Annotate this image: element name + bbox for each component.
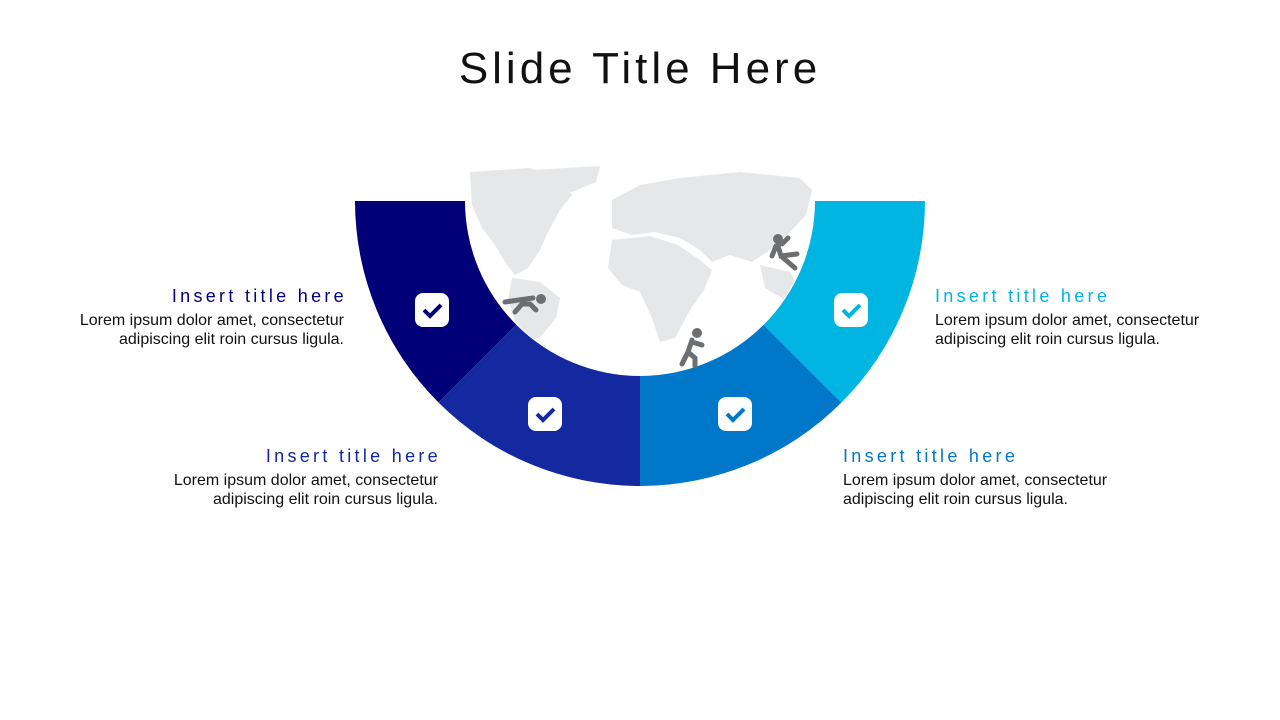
text block 3 [843, 446, 1107, 508]
text block 4: Insert title here [935, 286, 1110, 306]
text block 2: Lorem ipsum dolor amet, consectetur [174, 472, 438, 489]
segment 4 [764, 201, 925, 402]
segment 3 [640, 325, 842, 486]
text block 1: adipiscing elit roin cursus ligula. [119, 331, 344, 348]
text block 2: adipiscing elit roin cursus ligula. [213, 491, 438, 508]
icon: check 3 [718, 397, 752, 431]
world map [470, 166, 812, 345]
icon: falling person right [772, 234, 797, 268]
icon: check 4 [834, 293, 868, 327]
text block 1: Lorem ipsum dolor amet, consectetur [80, 312, 344, 329]
text block 3: Insert title here [843, 446, 1018, 466]
semicircle diagram [355, 166, 925, 486]
text block 3: Lorem ipsum dolor amet, consectetur [843, 472, 1107, 489]
text block 1 [80, 286, 347, 348]
text block 4 [935, 286, 1199, 348]
text block 2: Insert title here [266, 446, 441, 466]
text block 1: Insert title here [172, 286, 347, 306]
text block 2 [174, 446, 441, 508]
segment 1 [355, 201, 516, 402]
icon: running person [682, 328, 702, 366]
icon: falling person left [505, 294, 546, 312]
title: Slide Title Here [459, 44, 821, 93]
text block 4: adipiscing elit roin cursus ligula. [935, 331, 1160, 348]
icon: check 2 [528, 397, 562, 431]
text block 4: Lorem ipsum dolor amet, consectetur [935, 312, 1199, 329]
text block 3: adipiscing elit roin cursus ligula. [843, 491, 1068, 508]
segment 2 [438, 325, 640, 486]
icon: check 1 [415, 293, 449, 327]
